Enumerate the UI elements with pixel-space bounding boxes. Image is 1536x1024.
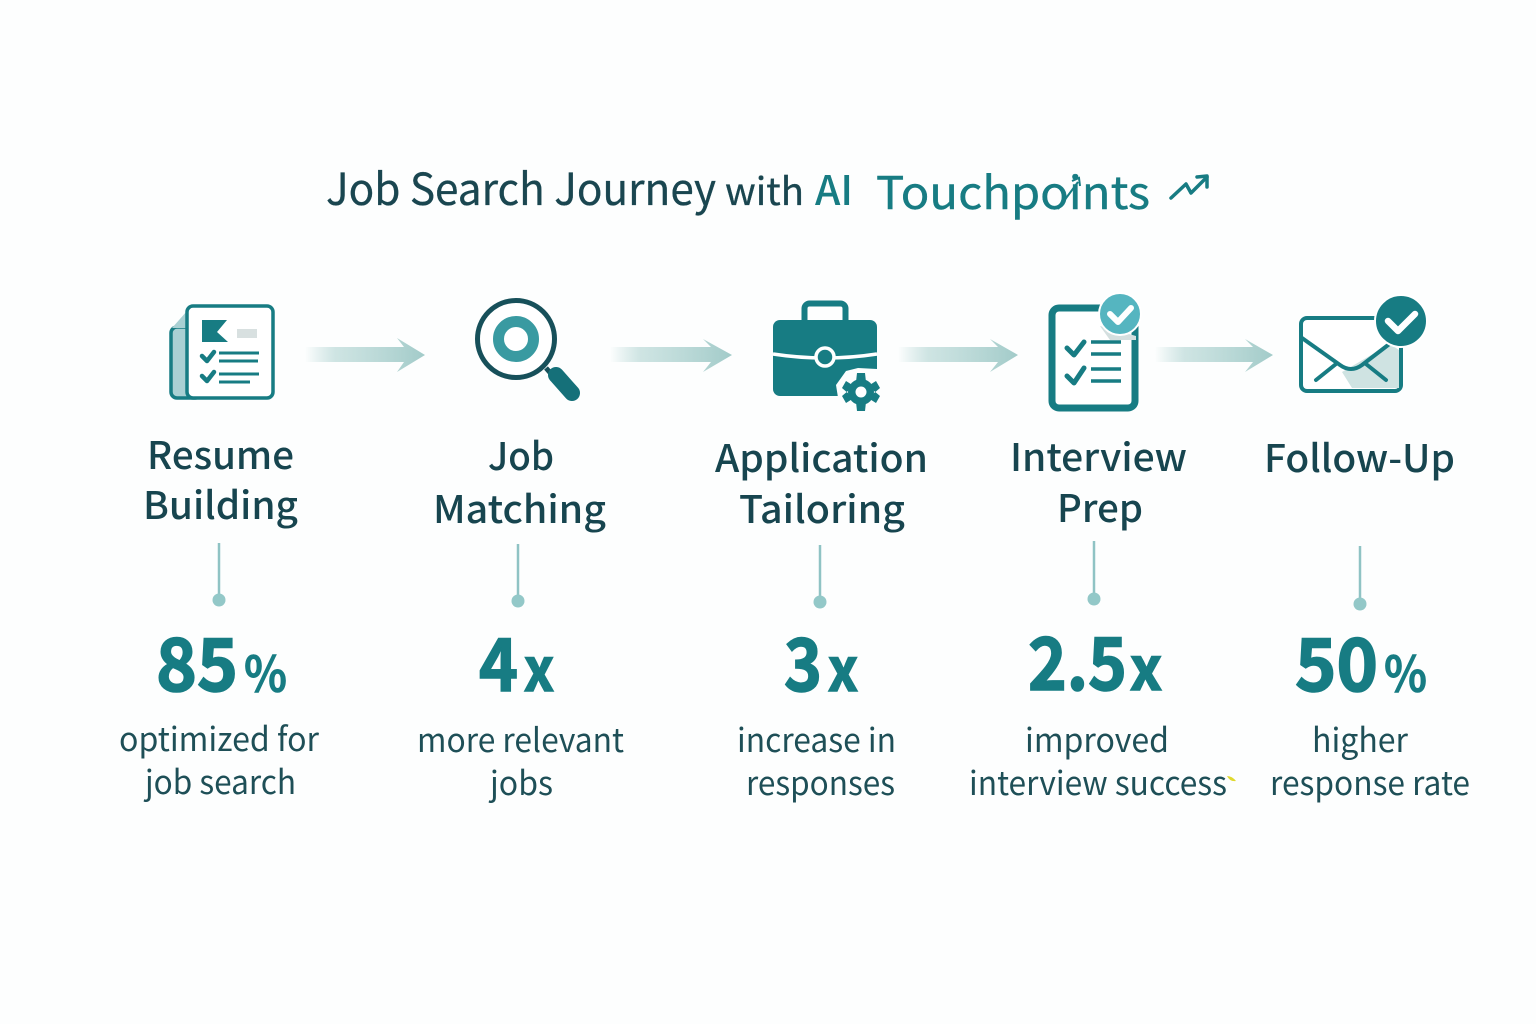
- connector: [1354, 546, 1366, 610]
- icon: briefcase with gear: [773, 304, 884, 411]
- description: optimized for: [119, 713, 319, 761]
- heading: application tailoring: Tailoring: [739, 479, 905, 534]
- title: AI: [815, 157, 853, 217]
- icon: interview checklist: [1052, 293, 1141, 408]
- stat: 85%: [156, 607, 287, 713]
- heading: resume building: [143, 425, 298, 530]
- description: [969, 714, 1227, 805]
- heading: interview prep: Prep: [1057, 478, 1143, 533]
- title: with: [725, 161, 804, 216]
- title: Touchpoints: [876, 157, 1150, 222]
- icon: magnifying glass: [478, 300, 572, 393]
- heading: application tailoring: [715, 428, 928, 534]
- description: more relevant: [417, 714, 624, 762]
- description: increase in: [737, 714, 896, 762]
- stat: 50%: 50: [1295, 607, 1378, 713]
- heading: resume building: Resume: [147, 425, 294, 480]
- stat: 4x: [479, 607, 554, 713]
- heading: application tailoring: Application: [715, 428, 928, 483]
- stat: 3x: 3: [784, 607, 822, 713]
- step 2: job matching: [417, 426, 624, 805]
- description: [119, 713, 319, 804]
- description: interview success: [969, 757, 1227, 805]
- icon: envelope with check: [1301, 295, 1427, 391]
- step 1: resume building: [119, 425, 319, 804]
- connector: [1088, 541, 1100, 606]
- stat: 85%: %: [244, 635, 287, 707]
- icon: resume document: [171, 306, 273, 398]
- step 4: interview prep: [969, 427, 1236, 805]
- description: response rate: [1270, 757, 1470, 805]
- step 3: application tailoring: [715, 428, 928, 805]
- connector: [814, 545, 826, 608]
- arrow: job matching to application: [610, 339, 732, 372]
- heading: job matching: Matching: [433, 479, 606, 534]
- heading: resume building: Building: [143, 475, 298, 530]
- arrow: interview to follow-up: [1155, 339, 1273, 372]
- description: higher: [1312, 714, 1408, 762]
- stat: 85%: 85: [156, 607, 238, 713]
- stat: 2.5x: x: [1130, 621, 1162, 708]
- stat: 4x: 4: [479, 607, 518, 713]
- connector: [212, 543, 226, 606]
- title: Job Search Journey: [326, 154, 716, 218]
- stat: 2.5x: 2.5: [1028, 606, 1127, 712]
- arrow: application to interview: [898, 339, 1018, 372]
- heading: job matching: [433, 426, 606, 534]
- heading: follow-up: Follow-Up: [1264, 428, 1455, 483]
- stat: 50%: [1295, 607, 1427, 713]
- step 5: follow-up: [1264, 428, 1470, 805]
- stat: 3x: x: [828, 622, 858, 709]
- description: responses: [746, 757, 895, 805]
- description: [417, 714, 624, 805]
- icon: trend arrow: [1171, 176, 1207, 198]
- stat: 4x: x: [524, 622, 554, 709]
- heading: interview prep: [1010, 427, 1187, 533]
- description: [1270, 714, 1470, 805]
- description: improved: [1025, 714, 1169, 762]
- stat: 3x: [784, 607, 858, 713]
- connector: [512, 544, 524, 608]
- description: [737, 714, 896, 805]
- description: job search: [143, 756, 296, 804]
- description: jobs: [488, 757, 553, 805]
- heading: job matching: Job: [488, 426, 554, 481]
- title: [326, 154, 1150, 222]
- heading: interview prep: Interview: [1010, 427, 1187, 482]
- arrow: resume to job matching: [305, 338, 425, 372]
- stat: 50%: %: [1384, 635, 1427, 707]
